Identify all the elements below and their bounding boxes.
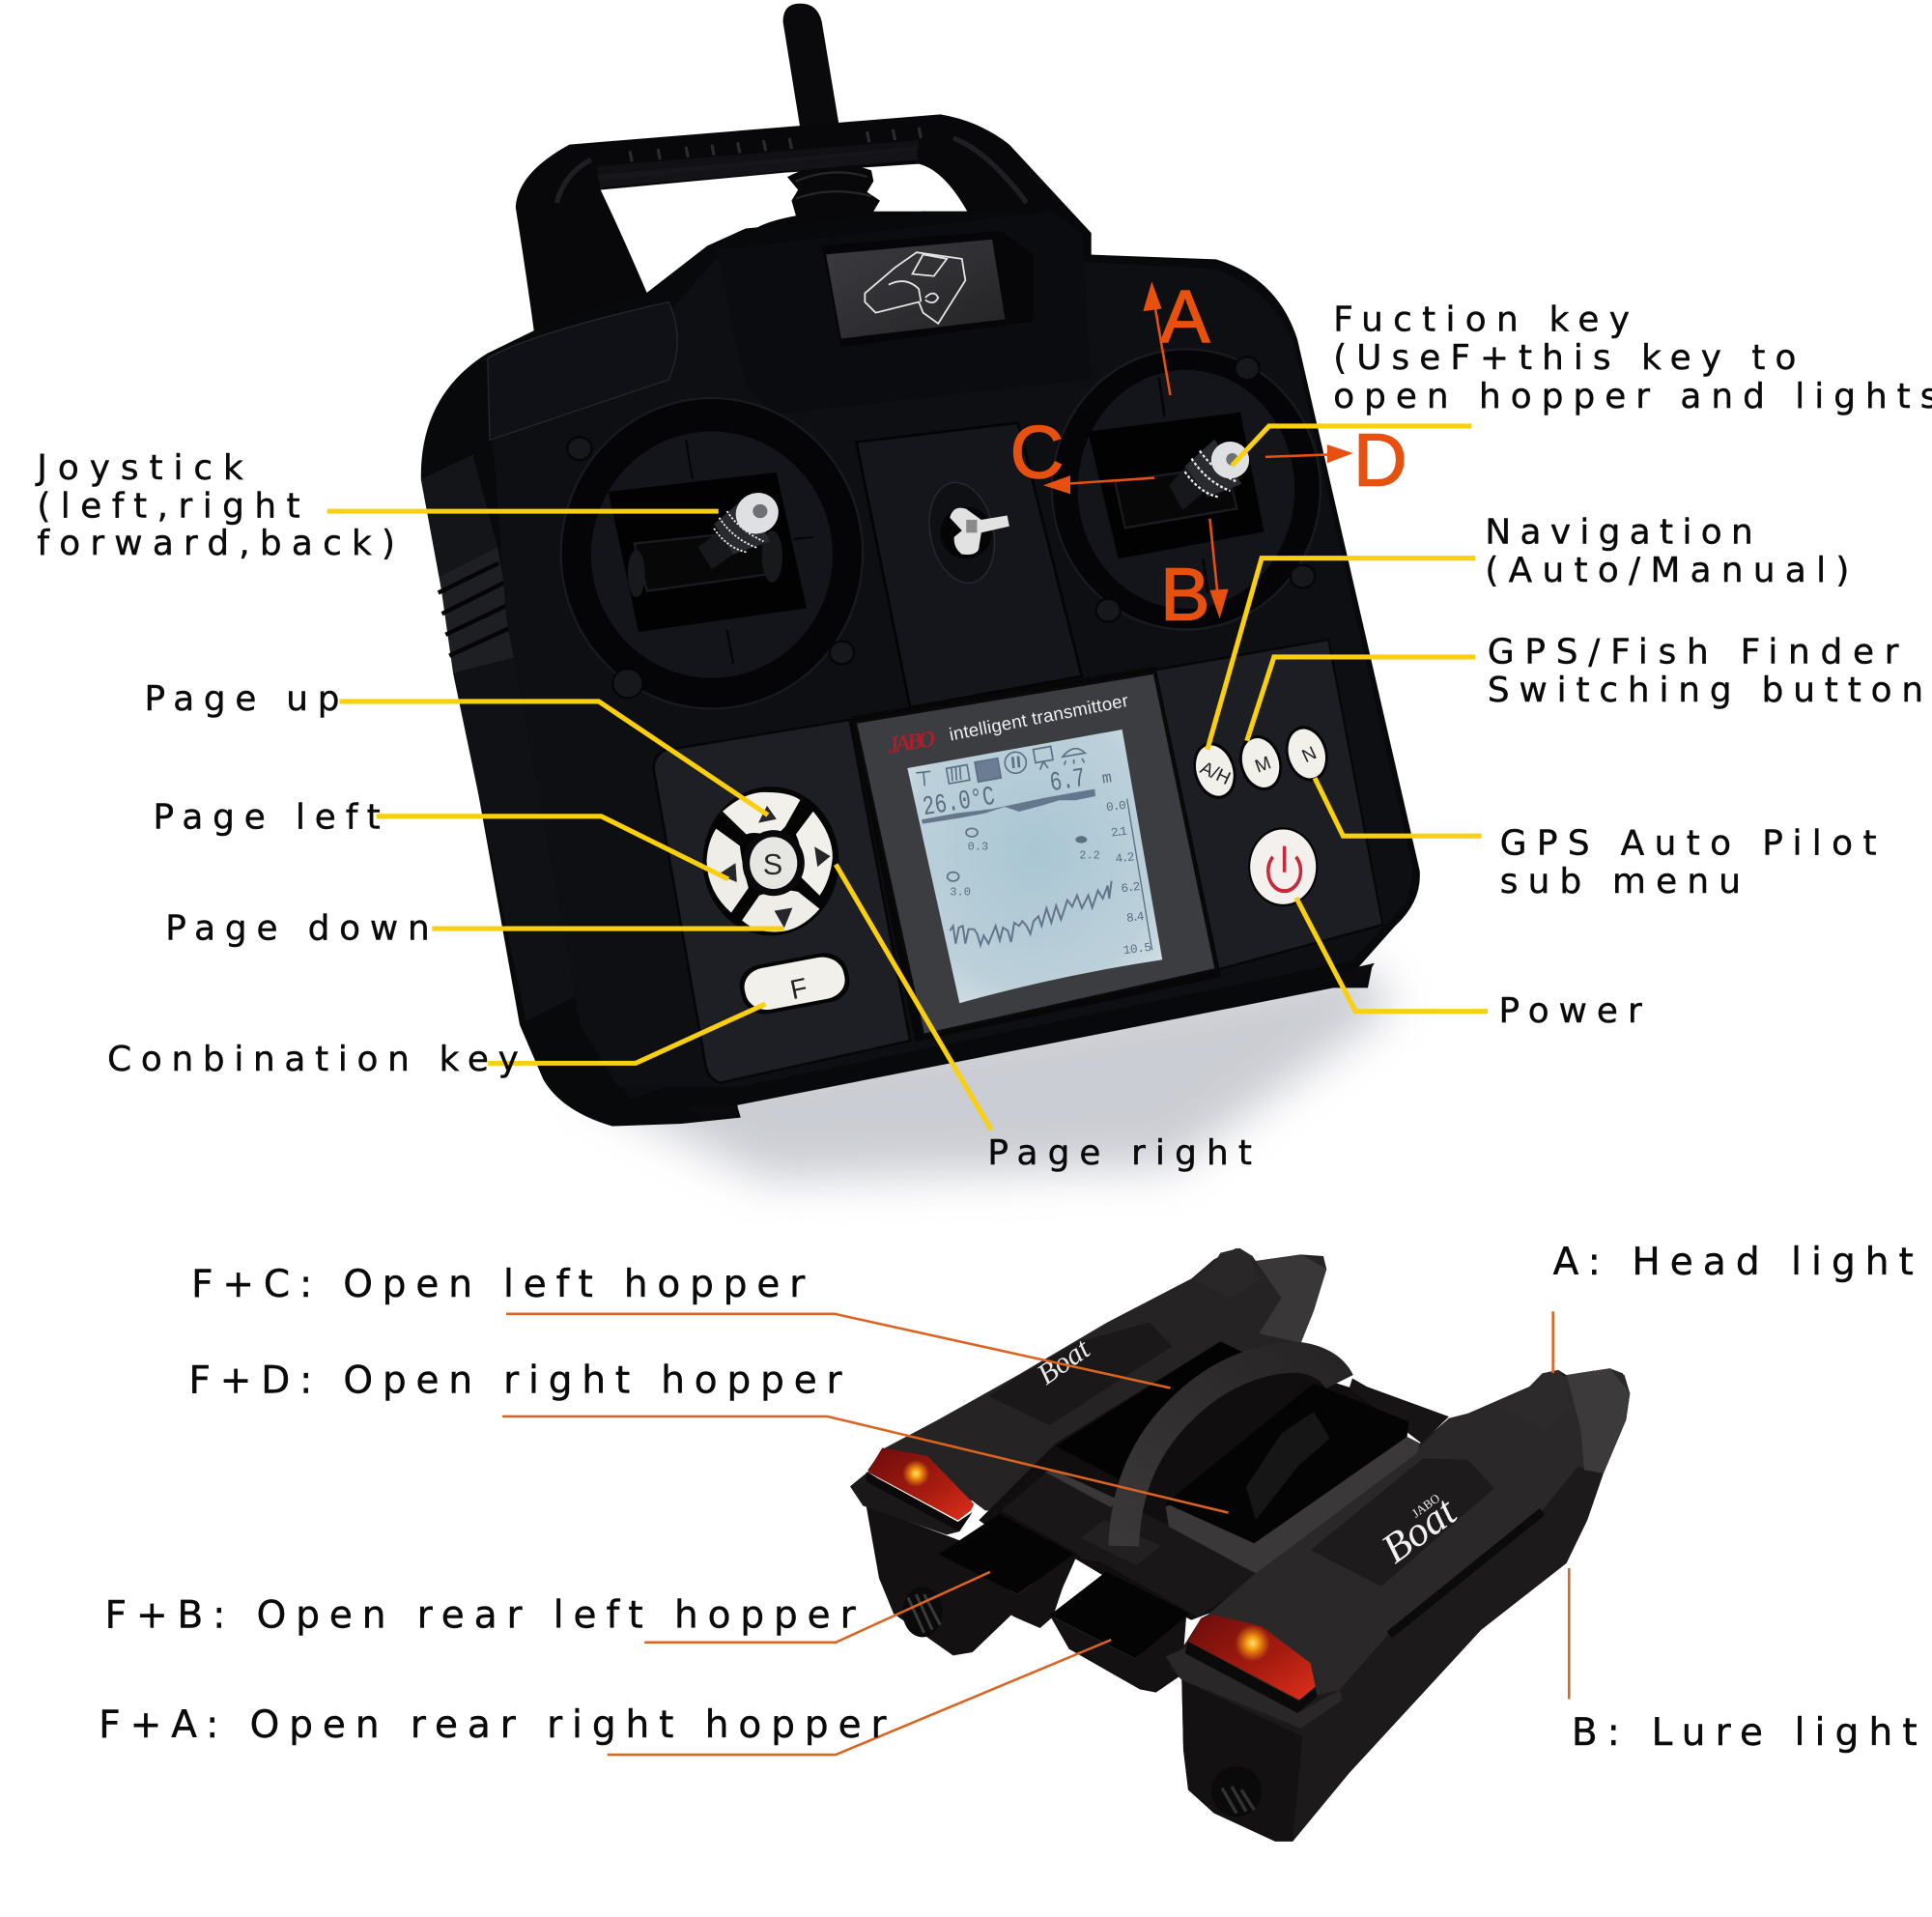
label: function key: open hopper and lights [1333,377,1932,416]
near hull body [1169,1368,1630,1842]
antenna [749,4,925,238]
key letters: M [1253,753,1274,778]
logo plate [826,240,1005,338]
status icons [916,747,1085,786]
fish markers: 2.2 [1079,848,1100,862]
lower right panel [1152,640,1382,971]
depth scale: 6.2 [1121,879,1141,896]
model text: intelligent transmittoer [948,690,1130,745]
key letters: N [1299,743,1320,767]
temperature reading: 26.0°C [921,783,997,823]
carrying handle [516,114,1092,388]
depth scale: 8.4 [1125,909,1145,926]
boat brand name: Boat [1374,1488,1465,1572]
handle base [1080,1520,1161,1565]
surface band [922,789,1095,824]
sonar bottom trace [950,881,1112,945]
label: function key: Fuction key [1333,300,1630,340]
A/H key [1187,736,1242,805]
flange left [850,1472,959,1534]
rear foot [682,1105,738,1119]
label: lure light: B: Lure light [1572,1711,1918,1755]
central deck [1002,1472,1259,1617]
lower grip [453,657,586,1021]
direction pad [702,787,839,935]
label: joystick: Joystick [35,448,243,488]
top centre block [716,212,1092,415]
label: head light: A: Head light [1553,1241,1914,1284]
left shoulder [488,302,677,440]
left joystick well [561,398,863,708]
near hull top [1186,1368,1630,1700]
remote shadow [581,963,1395,1179]
rear right hopper [1050,1572,1190,1659]
light base left [867,1472,973,1531]
direction letter A: A [1160,276,1209,358]
LCD screen [885,690,1162,1003]
key letters: F [787,972,810,1005]
right light glow [1235,1625,1270,1662]
boat brand name: JABO [1409,1491,1442,1521]
boat [850,1248,1630,1842]
centre panel [856,423,1082,707]
direction letter D: D [1353,419,1406,501]
main front panel [488,222,1413,1087]
logo plate surround [822,231,1033,347]
callout lines: remote [327,426,1488,1130]
centre key switch [921,476,1009,589]
label: F+D: F+D: Open right hopper [189,1359,843,1403]
label: page right: Page right [987,1133,1252,1173]
label: F+B: F+B: Open rear left hopper [105,1593,857,1637]
key letters: A/H [1197,758,1234,789]
fish markers: 3.0 [950,886,971,900]
flange right [1166,1648,1343,1729]
screw lower left [612,669,642,698]
M key [1234,730,1288,796]
far fin [1193,1248,1263,1298]
left light glow [902,1460,929,1487]
key letters [763,743,1320,1005]
grip seam [514,647,586,990]
depth scale: 0.0 [1105,798,1127,815]
near hull nose [1567,1368,1630,1474]
label: GPS fish finder [1488,632,1923,710]
F key [735,949,854,1017]
rear left hopper underside [939,1554,1074,1628]
screws [567,357,1315,664]
N key [1280,720,1334,787]
left tail light [867,1447,974,1520]
rear right hopper underside [1050,1614,1186,1693]
near hatch [1311,1458,1494,1587]
rear left hopper [939,1514,1074,1594]
grip leather [421,454,497,577]
side slot [1389,1511,1543,1635]
depth scale: 10.5 [1122,940,1152,958]
direction letter B: B [1160,555,1209,637]
direction letter C: C [1010,413,1064,495]
right foot [1332,963,1375,987]
tray inner wall [1246,1412,1330,1520]
label: navigation: (Auto/Manual) [1485,551,1849,590]
metre unit: m [1101,769,1113,789]
left stick [698,486,785,569]
rear face [1181,1680,1302,1842]
far hull rear [867,1505,1011,1655]
carry handle arch [1123,1358,1340,1546]
left fan grill [902,1587,943,1637]
label: GPS auto pilot: sub menu [1500,862,1741,901]
centre left hopper [1056,1341,1254,1481]
grip ribs [439,547,517,673]
deck filler [979,1341,1381,1620]
label: GPS auto pilot [1500,823,1876,901]
base bezel edge [851,667,1221,1042]
rear deck piece [1350,1379,1449,1444]
screen bezel [856,673,1216,1035]
boat logo [865,252,965,324]
depth scale: 2.1 [1110,824,1128,841]
label: joystick: (left,right [37,487,300,527]
left gimbal [628,530,782,597]
label: navigation [1485,512,1849,590]
display glass [907,730,1162,1003]
right gimbal [1115,467,1237,528]
depth scale [1105,798,1152,958]
label: page up: Page up [145,679,339,719]
far hatch [988,1322,1172,1425]
fish markers [948,828,1100,900]
fish markers: 0.3 [968,840,988,853]
centre tray rim [1166,1437,1420,1573]
depth scale: 4.2 [1115,849,1135,867]
near fin [1500,1370,1575,1430]
far hull nose [1256,1254,1326,1343]
back shell [421,212,1420,1127]
right tail light [1188,1615,1316,1700]
callout lines: boat [502,1311,1569,1755]
power key [1249,828,1317,905]
label: function key [1333,300,1932,416]
right joystick well [1052,349,1321,630]
far hull top [867,1248,1326,1510]
label: navigation: Navigation [1485,512,1753,552]
stick direction arrows [1043,281,1353,618]
brand text: JABO [885,727,937,758]
label: joystick: forward,back) [37,524,395,563]
label: F+A: F+A: Open rear right hopper [99,1703,888,1747]
right fan grill [1211,1766,1262,1817]
label: page left: Page left [153,798,381,838]
right stick [1169,440,1249,510]
label: F+C: F+C: Open left hopper [191,1263,806,1306]
centre rail [1045,1471,1118,1507]
label: GPS fish finder: GPS/Fish Finder [1488,632,1899,672]
transmitter remote [421,4,1420,1127]
label: GPS auto pilot: GPS Auto Pilot [1500,823,1876,863]
far hull name: Boat [1031,1331,1096,1391]
label: function key: (UseF+this key to [1333,338,1796,378]
label: GPS fish finder: Switching button [1488,671,1923,710]
label: page down: Page down [165,909,430,949]
left front bezel [492,420,703,1099]
depth reading: 6.7 [1048,764,1088,799]
light base right [1185,1642,1317,1713]
lower left panel [654,720,910,1083]
centre tray interior [1166,1384,1408,1543]
depth scale rule [1127,799,1152,950]
label: combination key: Conbination key [107,1040,519,1079]
label: joystick [35,448,395,563]
label: power: Power [1498,991,1642,1031]
key letters: S [763,848,782,881]
